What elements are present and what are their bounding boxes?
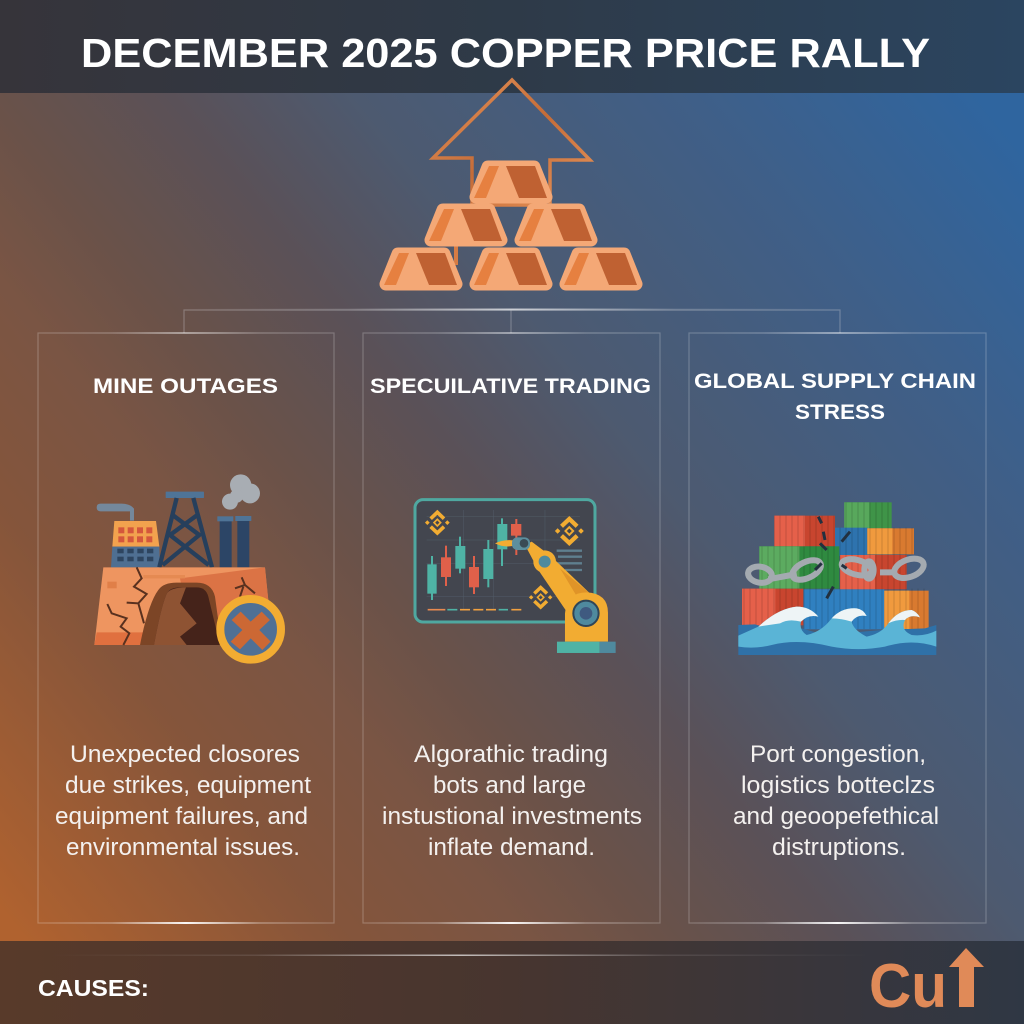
icon: trading robot arm xyxy=(415,500,616,653)
logo: Cu with up arrow: Cu xyxy=(869,952,947,1021)
panel: mine outages xyxy=(38,332,334,924)
body text: mine outages: Unexpected closores xyxy=(70,741,300,768)
body text: speculative trading: instustional investments xyxy=(382,803,642,830)
arrow xyxy=(433,80,590,205)
body text: global supply chain stress: distruptions. xyxy=(772,834,906,861)
body text: speculative trading xyxy=(382,741,642,861)
heading: global supply chain stress: STRESS xyxy=(795,400,885,424)
body text: global supply chain stress: and geoopefethical xyxy=(733,803,939,830)
panel: global supply chain stress xyxy=(689,332,986,924)
body text: global supply chain stress: Port congestion, xyxy=(750,741,926,768)
heading: speculative trading: SPECUILATIVE TRADING xyxy=(370,374,651,398)
icon: mine with factory xyxy=(94,474,281,660)
footer label: CAUSES: xyxy=(38,975,149,1001)
body text: speculative trading: Algorathic trading xyxy=(414,741,608,768)
heading: global supply chain stress xyxy=(694,369,976,424)
icon: copper bars with up arrow xyxy=(384,80,637,285)
body text: global supply chain stress xyxy=(733,741,939,861)
connector lines xyxy=(184,310,840,333)
copper bar stack xyxy=(384,166,637,285)
logo arrow xyxy=(949,948,984,1007)
footer bar xyxy=(0,941,1024,1024)
body text: speculative trading: inflate demand. xyxy=(428,834,595,861)
heading: global supply chain stress: GLOBAL SUPPLY CHAIN xyxy=(694,369,976,393)
body text: mine outages: equipment failures, and xyxy=(55,803,308,830)
body text: mine outages: environmental issues. xyxy=(66,834,300,861)
body text: global supply chain stress: logistics botteclzs xyxy=(741,772,935,799)
header bar xyxy=(0,0,1024,93)
heading: mine outages: MINE OUTAGES xyxy=(93,374,278,398)
panel: speculative trading xyxy=(363,332,660,924)
title: DECEMBER 2025 COPPER PRICE RALLY xyxy=(81,30,930,76)
logo: Cu with up arrow xyxy=(869,948,984,1021)
icon: containers, broken chain and waves xyxy=(738,502,936,655)
body text: speculative trading: bots and large xyxy=(433,772,586,799)
body text: mine outages: due strikes, equipment xyxy=(65,772,311,799)
body text: mine outages xyxy=(55,741,311,861)
